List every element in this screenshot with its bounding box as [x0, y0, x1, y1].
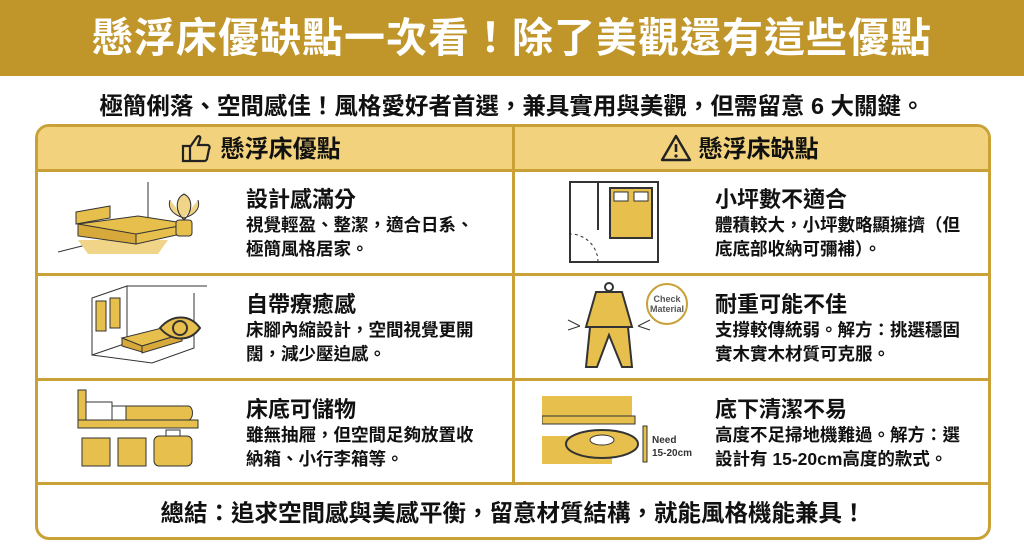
text: healing: 自帶療癒感	[246, 292, 356, 317]
text: healing: 闊，減少壓迫感。	[246, 344, 386, 364]
text: storage: 雖無抽屜，但空間足夠放置收	[246, 425, 474, 445]
text: weight: 耐重可能不佳	[715, 292, 847, 317]
text: small space: 小坪數不適合	[715, 187, 847, 212]
text: healing	[246, 292, 474, 364]
text: small space: 底底部收納可彌補）。	[715, 239, 881, 259]
text: design	[246, 187, 474, 259]
text: healing: 床腳內縮設計，空間視覺更開	[246, 320, 474, 340]
subtitle: 極簡俐落、空間感佳！風格愛好者首選，兼具實用與美觀，但需留意 6 大關鍵。	[99, 93, 925, 119]
icon: robot vacuum	[542, 396, 692, 464]
text: weight: 支撐較傳統弱。解方：挑選穩固	[715, 320, 960, 340]
icon: weight	[568, 282, 688, 368]
text: design: 視覺輕盈、整潔，適合日系、	[246, 215, 474, 235]
header: pros: 懸浮床優點	[221, 136, 341, 163]
text: storage	[246, 397, 474, 469]
text: weight: 實木實木材質可克服。	[715, 344, 890, 364]
text: weight	[715, 292, 960, 364]
icon: floor plan	[569, 181, 659, 263]
main panel	[35, 124, 991, 540]
icon: bed with plant	[58, 182, 200, 254]
icon: robot vacuum: 15-20cm	[652, 448, 692, 459]
text: design: 設計感滿分	[246, 187, 356, 212]
title bar	[0, 0, 1024, 76]
header: cons: 懸浮床缺點	[699, 136, 819, 163]
text: small space: 體積較大，小坪數略顯擁擠（但	[715, 215, 960, 235]
icon: room with eye	[92, 285, 207, 364]
text: cleaning: 設計有 15-20cm高度的款式。	[715, 449, 947, 469]
icon: robot vacuum: Need	[652, 435, 676, 446]
summary: 總結：追求空間感與美感平衡，留意材質結構，就能風格機能兼具！	[160, 500, 866, 526]
icon: bed storage	[78, 390, 198, 466]
text: small space	[715, 187, 960, 259]
text: cleaning	[715, 397, 960, 469]
icon: weight: Material	[650, 304, 684, 314]
text: cleaning: 高度不足掃地機難過。解方：選	[715, 425, 960, 445]
text: design: 極簡風格居家。	[246, 239, 368, 259]
text: storage: 納箱、小行李箱等。	[246, 449, 404, 469]
text: cleaning: 底下清潔不易	[715, 397, 847, 422]
title bar: 懸浮床優缺點一次看！除了美觀還有這些優點	[92, 15, 932, 61]
icon: weight: Check	[653, 294, 682, 304]
text: storage: 床底可儲物	[246, 397, 356, 422]
